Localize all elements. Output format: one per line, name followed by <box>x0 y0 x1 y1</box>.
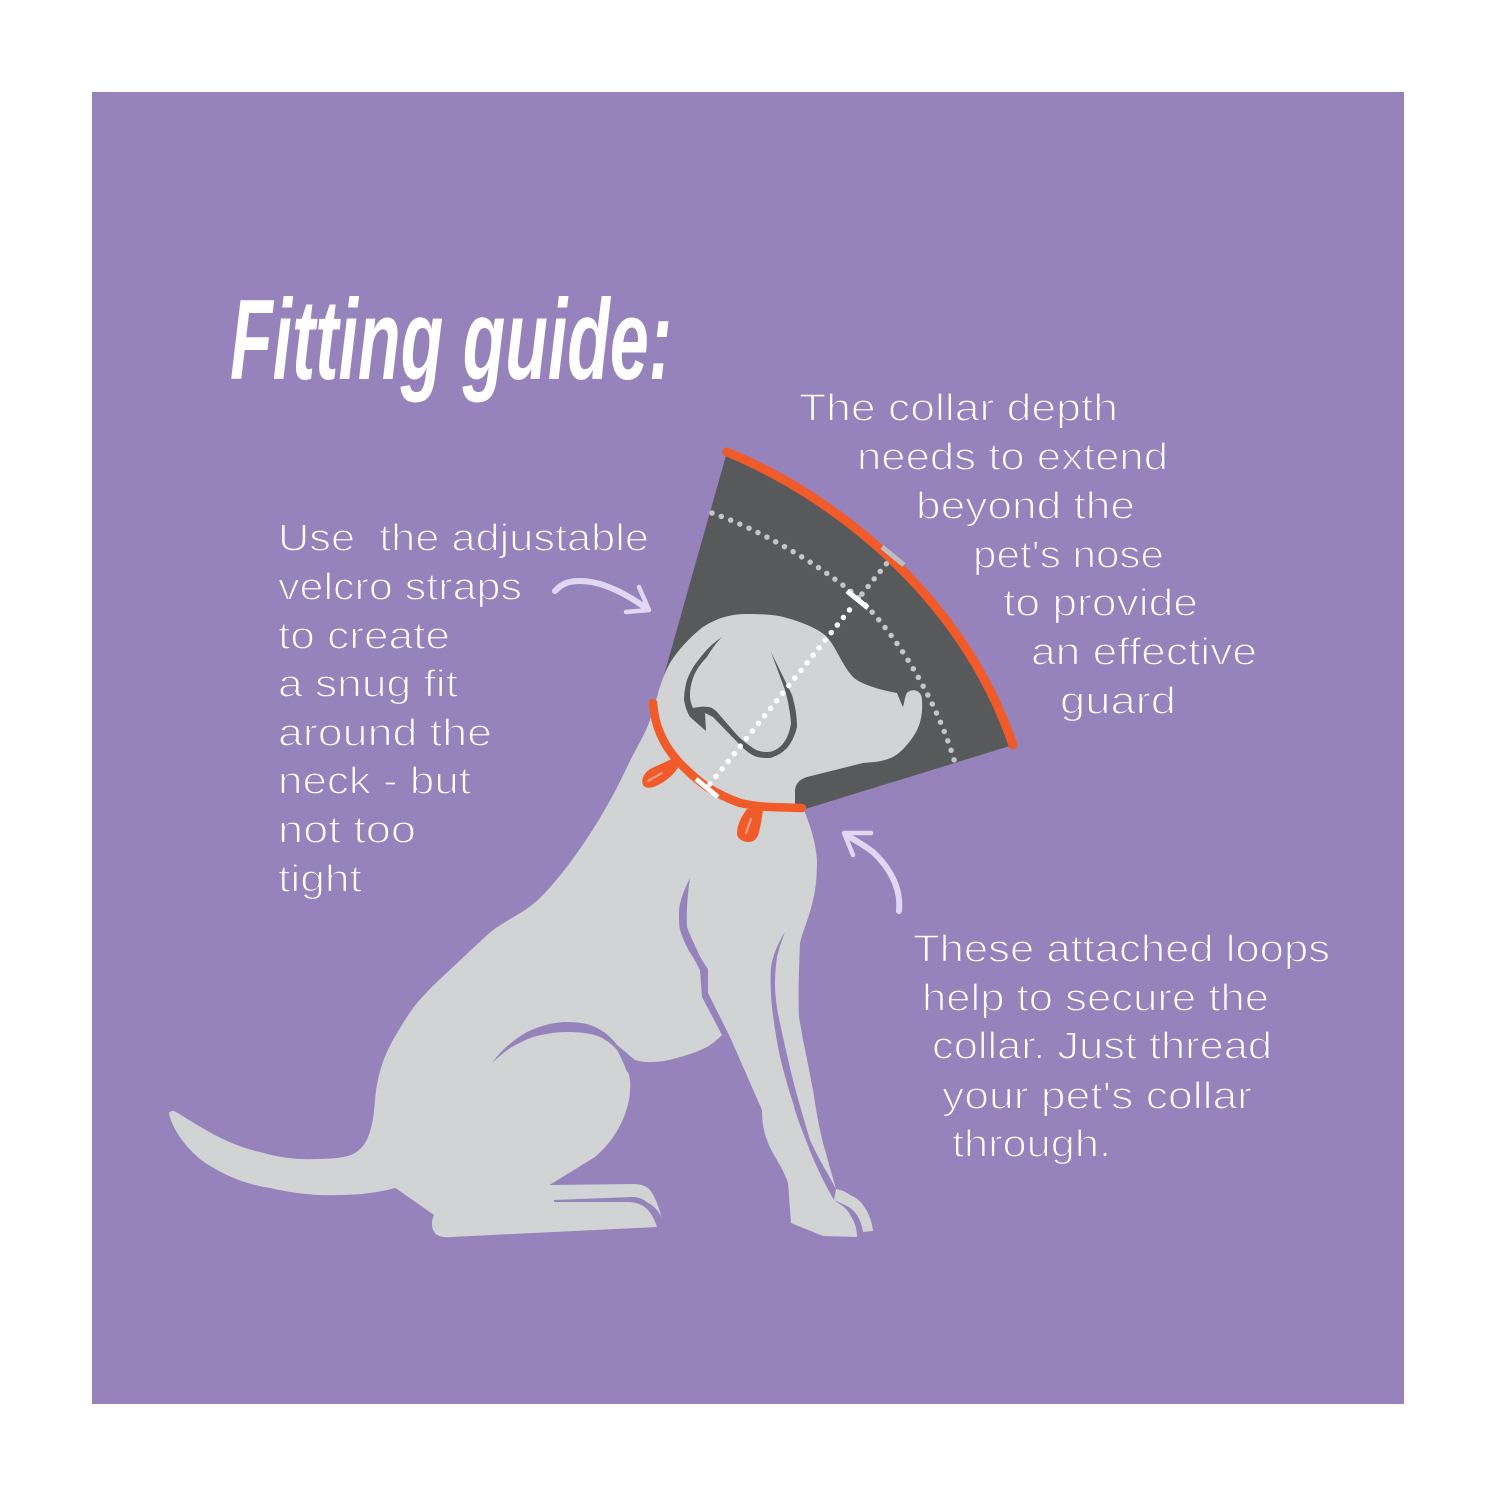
text block: collar depth: to provide <box>1003 582 1198 624</box>
text block: velcro straps: not too <box>278 810 416 852</box>
text block: velcro straps: around the <box>278 712 492 754</box>
orange neck band <box>653 703 802 808</box>
text block: velcro straps: velcro straps <box>278 566 522 608</box>
text block: velcro straps: to create <box>278 616 450 658</box>
purple background panel <box>92 92 1404 1404</box>
text block: collar depth <box>799 388 1257 722</box>
dotted guide arc <box>712 513 955 763</box>
text block: velcro straps: Use the adjustable <box>278 518 649 560</box>
tick marks <box>696 547 904 797</box>
text block: collar depth: The collar depth <box>799 388 1118 430</box>
far-leg shadow stroke <box>771 932 836 1200</box>
text block: attached loops: help to secure the <box>922 978 1269 1020</box>
text block: collar depth: an effective <box>1031 632 1257 674</box>
collar loops <box>642 757 763 842</box>
text block: velcro straps: neck - but <box>278 760 471 802</box>
text block: collar depth: needs to extend <box>857 436 1168 478</box>
text block: attached loops: These attached loops <box>913 928 1330 970</box>
dog silhouette <box>169 614 922 1237</box>
text block: attached loops <box>913 928 1330 1166</box>
text block: attached loops: your pet's collar <box>942 1076 1252 1118</box>
arrow: to velcro straps <box>555 581 649 612</box>
title: Fitting guide: <box>230 277 672 404</box>
text block: collar depth: guard <box>1060 680 1176 722</box>
ear <box>684 637 797 758</box>
text block: collar depth: pet's nose <box>973 534 1164 576</box>
chest shadow stroke <box>679 878 730 1037</box>
haunch crease <box>492 1022 640 1072</box>
text block: collar depth: beyond the <box>916 486 1135 528</box>
cone collar <box>657 452 1013 810</box>
depth measure: dotted line <box>710 563 887 784</box>
text block: velcro straps <box>278 518 649 900</box>
orange cone rim <box>727 452 1013 745</box>
text block: velcro straps: a snug fit <box>278 664 459 706</box>
text block: attached loops: collar. Just thread <box>932 1026 1272 1068</box>
arrow: to collar loops <box>844 833 899 911</box>
text block: velcro straps: tight <box>278 858 363 900</box>
text block: attached loops: through. <box>952 1124 1111 1166</box>
